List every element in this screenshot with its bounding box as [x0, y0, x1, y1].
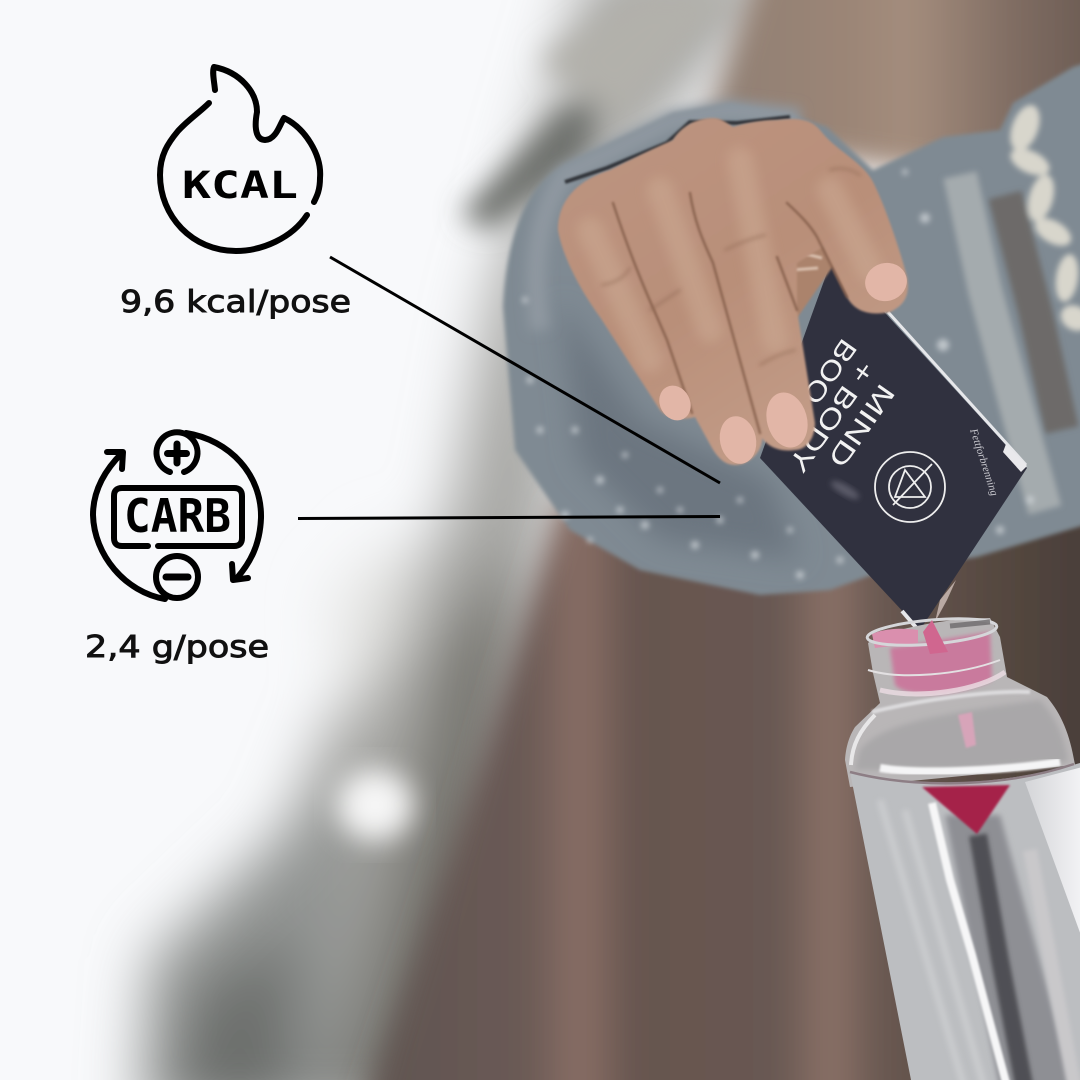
carb box [114, 488, 242, 546]
sachet round logo [875, 452, 945, 522]
icon: carb cycle [93, 432, 261, 599]
glass left highlight [851, 715, 875, 765]
red powder in water [922, 785, 1010, 834]
left grey streaks [880, 800, 985, 1080]
palm shadow behind fingers [775, 225, 836, 318]
label: kcal value: 9,6 kcal/pose [120, 285, 351, 320]
cycle arcs and arrows [186, 433, 261, 578]
sachet brand text [783, 334, 901, 478]
sachet script text: Fettforbrenning [967, 426, 1000, 498]
sleeve under-hand shading [560, 300, 800, 560]
finger highlights [590, 160, 870, 360]
minus circle [156, 556, 198, 598]
pink powder stream [923, 620, 948, 654]
sachet brand text: BOO [797, 334, 863, 410]
plus circle [156, 432, 197, 472]
photo: glass bottle [845, 614, 1080, 1080]
sachet brand text: + BODY [783, 356, 881, 478]
speckled pattern band [960, 175, 1045, 510]
bottle body above water [845, 618, 1075, 787]
icon: kcal flame [160, 67, 320, 251]
bottle neck with pink powder [890, 632, 992, 694]
fingernails [653, 258, 911, 467]
white refraction streak [932, 803, 1008, 1080]
icon: carb cycle: CARB [124, 489, 231, 543]
water column [850, 760, 1080, 1080]
right bright section [1025, 768, 1080, 932]
sachet brand text: MIND [822, 379, 901, 473]
sachet white edge [888, 312, 1026, 465]
photo: sachet [760, 256, 1027, 632]
white diamonds [1005, 101, 1080, 336]
connector line: kcal [330, 257, 720, 483]
photo: hand [558, 118, 911, 467]
bottle rim [866, 614, 998, 650]
centre dark section [945, 815, 1075, 1080]
finger creases [613, 193, 847, 433]
cuff rib edge [536, 110, 800, 330]
sweater knit pattern [522, 101, 1080, 579]
icon: kcal flame: KCAL [182, 164, 298, 207]
water surface highlight [880, 762, 1060, 771]
connector line: carb [298, 516, 720, 518]
photo: sweater sleeve [503, 60, 1080, 595]
label: carb value: 2,4 g/pose [85, 630, 269, 665]
